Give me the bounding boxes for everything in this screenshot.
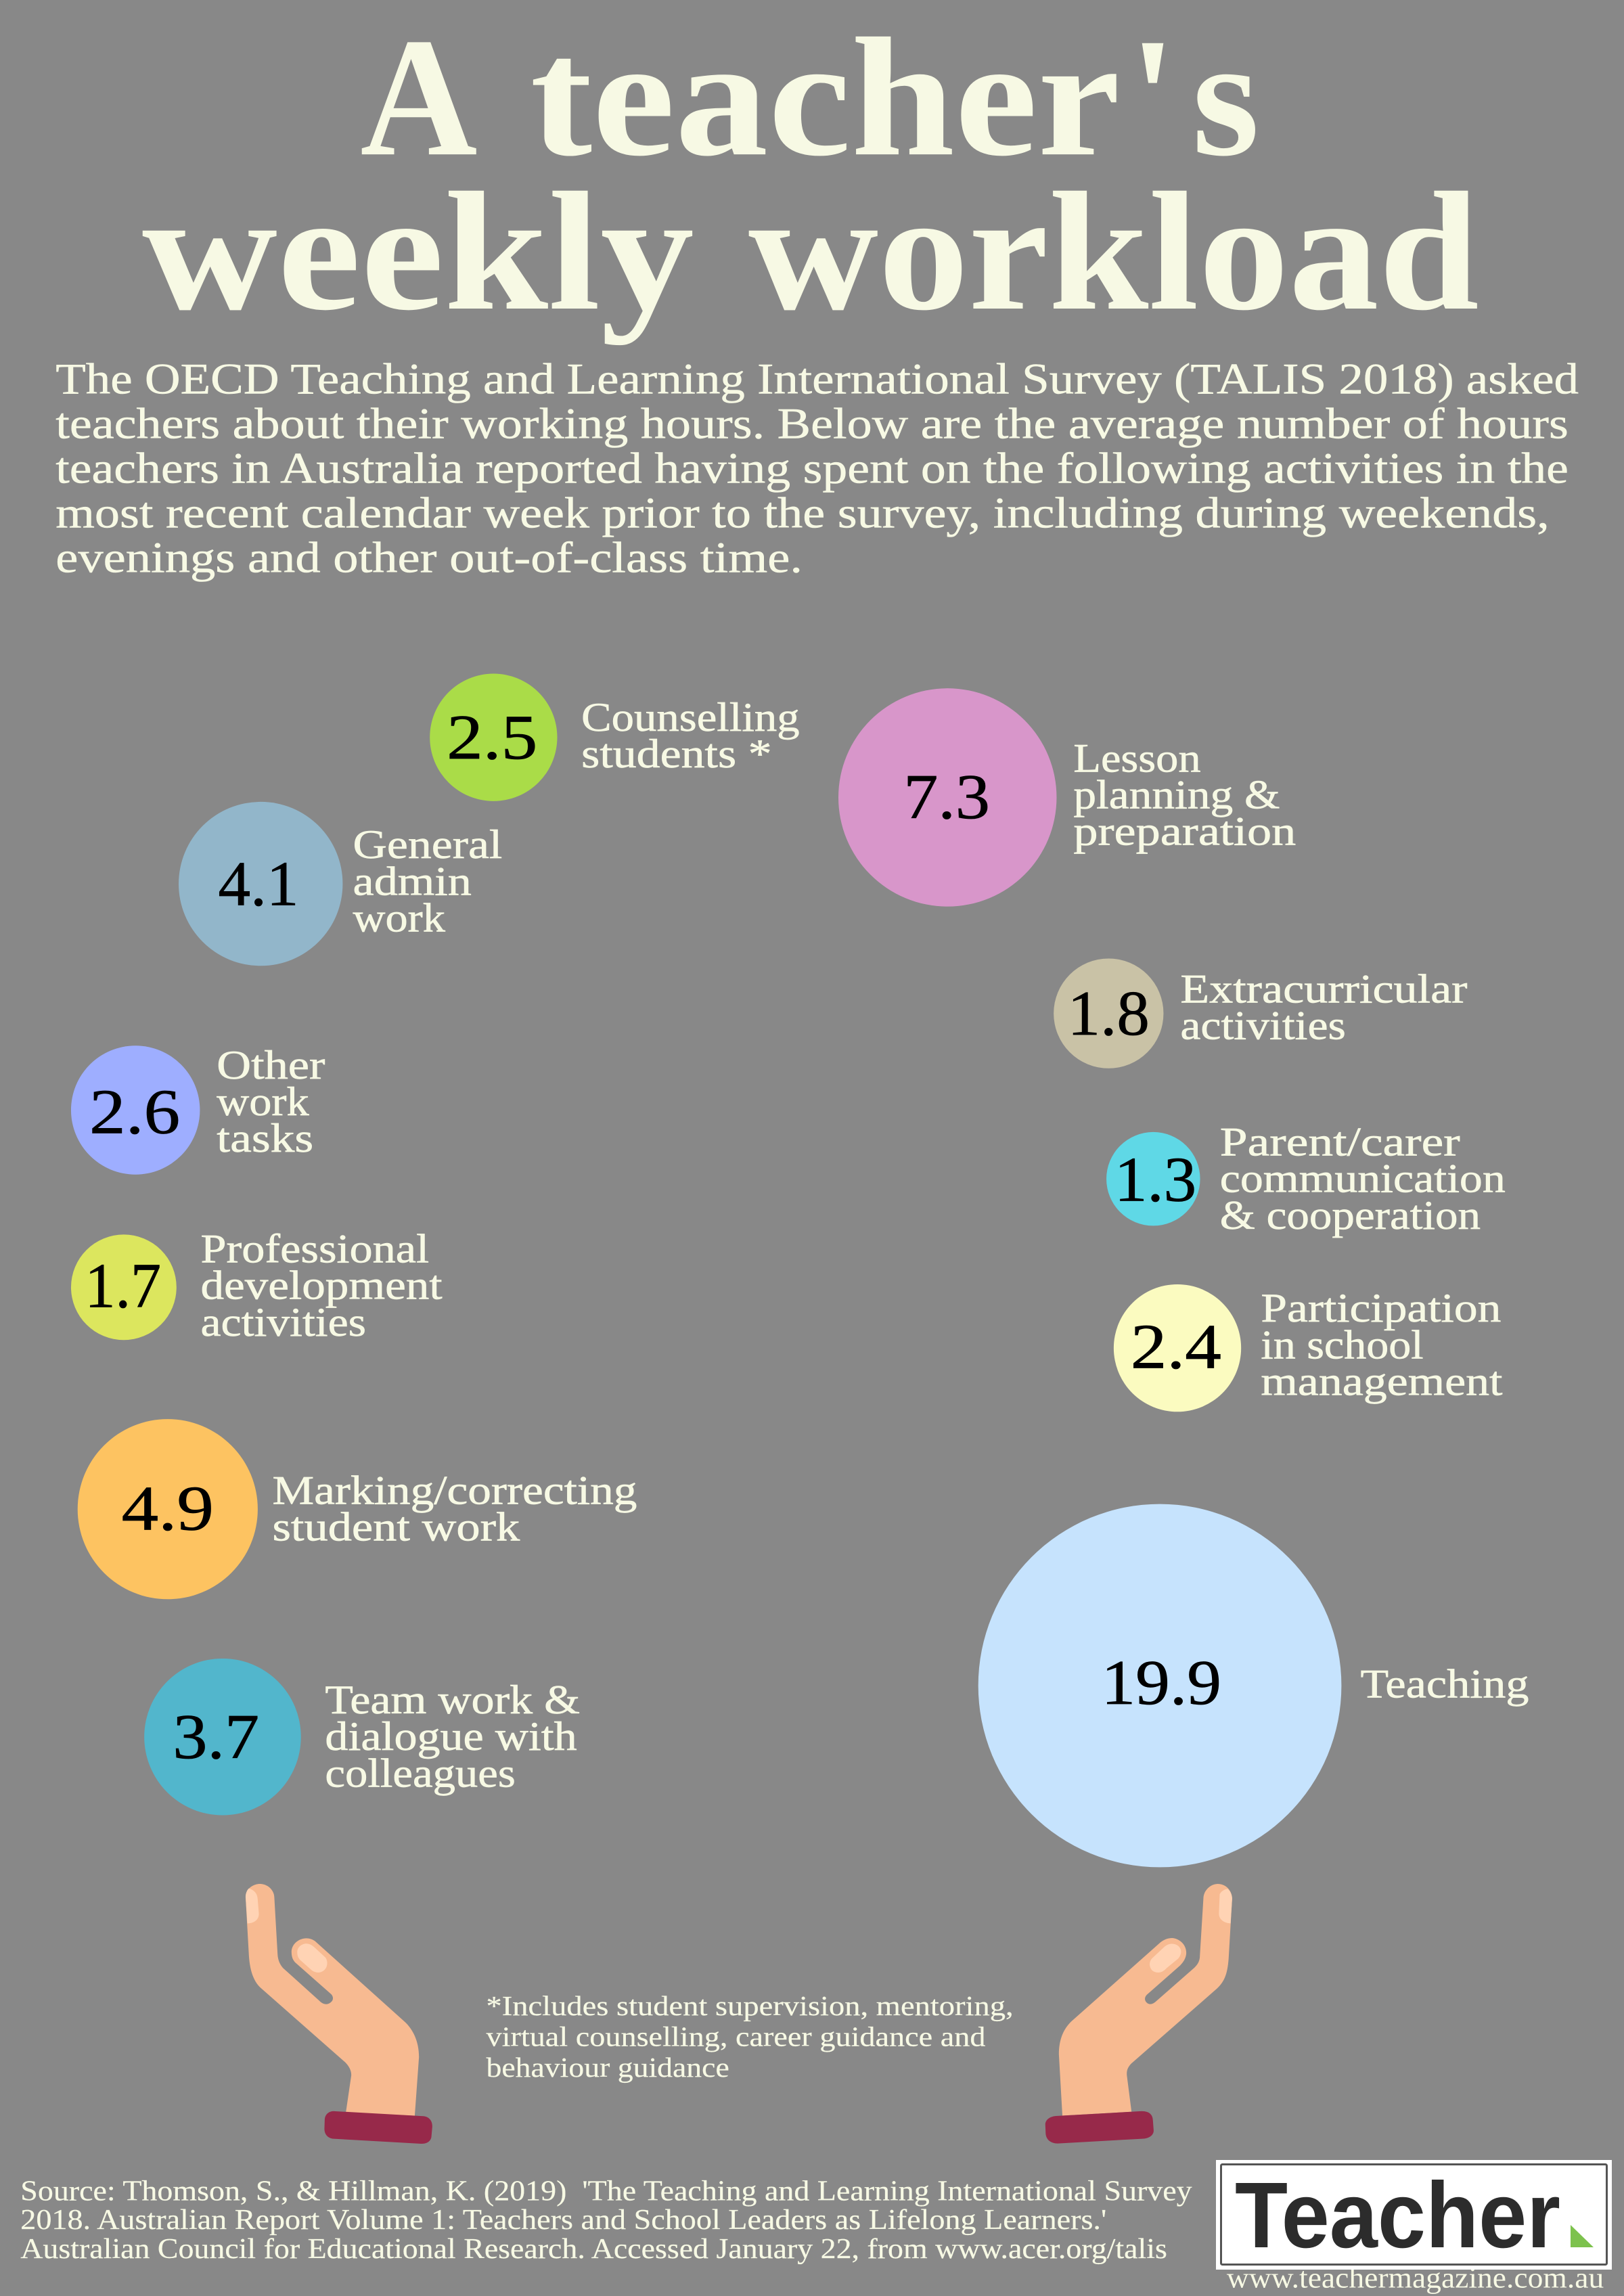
item: counselling students 2.5: students * [581,731,772,777]
item: marking 4.9: student work [273,1505,520,1550]
logo: Teacher: Teacher [1235,2163,1560,2268]
item: teaching 19.9 [978,1504,1529,1867]
item: other work tasks 2.6: Other [217,1043,325,1088]
item: other work tasks 2.6: 2.6 [89,1077,180,1147]
title: s [1192,3,1259,192]
item: other work tasks 2.6 [71,1043,325,1175]
item: general admin work 4.1: 4.1 [218,849,298,919]
item: teaching 19.9: 19.9 [1101,1648,1221,1718]
item: general admin work 4.1: admin [353,859,472,904]
title: A [360,3,478,192]
item: marking 4.9: Marking/correcting [273,1468,637,1514]
item: marking 4.9: 4.9 [122,1474,214,1544]
intro paragraph: teachers in Australia reported having spent on the following activities in the [55,445,1569,493]
item: parent/carer communication 1.3: Parent/carer [1220,1120,1460,1165]
website url: www.teachermagazine.com.au [1227,2261,1604,2294]
footnote: virtual counselling, career guidance and [487,2021,986,2052]
intro paragraph: The OECD Teaching and Learning International Survey (TALIS 2018) asked [55,355,1579,404]
source citation [20,2176,1193,2265]
item: marking 4.9 [78,1419,637,1599]
item: parent/carer communication 1.3: 1.3 [1114,1145,1196,1215]
footnote [487,1990,1014,2083]
item: general admin work 4.1 [179,802,502,966]
item: team work 3.7: 3.7 [173,1702,259,1772]
item: team work 3.7: dialogue with [325,1714,577,1759]
item: professional development 1.7 [71,1227,443,1345]
item: lesson planning 7.3: Lesson [1073,736,1201,782]
item: extracurricular activities 1.8: 1.8 [1068,978,1150,1049]
item: parent/carer communication 1.3: communication [1220,1156,1506,1202]
item: extracurricular activities 1.8: Extracurricular [1180,966,1468,1012]
source citation: Source: Thomson, S., & Hillman, K. (2019) 'The Teaching and Learning International Survey [20,2176,1193,2207]
item: parent/carer communication 1.3: & cooperation [1220,1193,1481,1238]
item: professional development 1.7: development [200,1263,443,1309]
item: other work tasks 2.6: tasks [217,1116,313,1161]
title [142,3,1479,346]
source citation: 2018. Australian Report Volume 1: Teachers and School Leaders as Lifelong Learners.' [20,2204,1106,2236]
item: other work tasks 2.6: work [217,1079,309,1125]
item: participation in school management 2.4 [1114,1284,1503,1412]
intro paragraph: teachers about their working hours. Below are the average number of hours [55,400,1569,449]
item: lesson planning 7.3: preparation [1073,809,1296,855]
title: teacher [530,3,1121,192]
footnote: behaviour guidance [487,2052,729,2083]
item: team work 3.7 [144,1659,580,1816]
item: professional development 1.7: Professional [200,1227,429,1272]
intro paragraph: most recent calendar week prior to the survey, including during weekends, [55,489,1550,538]
title: weekly [142,158,694,346]
item: extracurricular activities 1.8: activities [1180,1004,1346,1049]
item: parent/carer communication 1.3 [1106,1120,1506,1238]
source citation: Australian Council for Educational Research. Accessed January 22, from www.acer.org/talis [20,2233,1167,2265]
item: teaching 19.9: Teaching [1361,1661,1529,1707]
title: workload [748,158,1479,346]
item: team work 3.7: colleagues [325,1751,516,1796]
item: general admin work 4.1: General [353,822,502,868]
item: extracurricular activities 1.8 [1054,958,1468,1068]
item: counselling students 2.5: Counselling [581,695,800,740]
item: participation in school management 2.4: Participation [1261,1286,1501,1331]
footnote: *Includes student supervision, mentoring, [487,1990,1014,2021]
item: team work 3.7: Team work & [325,1678,580,1723]
item: participation in school management 2.4: management [1261,1359,1503,1404]
intro paragraph: evenings and other out-of-class time. [55,534,803,583]
item: general admin work 4.1: work [353,895,446,941]
item: lesson planning 7.3: 7.3 [903,762,990,832]
item: professional development 1.7: activities [200,1300,366,1345]
item: professional development 1.7: 1.7 [85,1251,161,1322]
title: ' [1129,3,1176,192]
item: participation in school management 2.4: in school [1261,1322,1424,1368]
item: counselling students 2.5 [430,674,800,801]
item: participation in school management 2.4: 2.4 [1131,1311,1221,1382]
icon: left hand [246,1884,432,2144]
item: lesson planning 7.3: planning & [1073,773,1280,818]
intro paragraph [55,355,1579,583]
item: lesson planning 7.3 [838,688,1296,907]
item: counselling students 2.5: 2.5 [447,702,537,773]
icon: right hand [1045,1884,1232,2144]
